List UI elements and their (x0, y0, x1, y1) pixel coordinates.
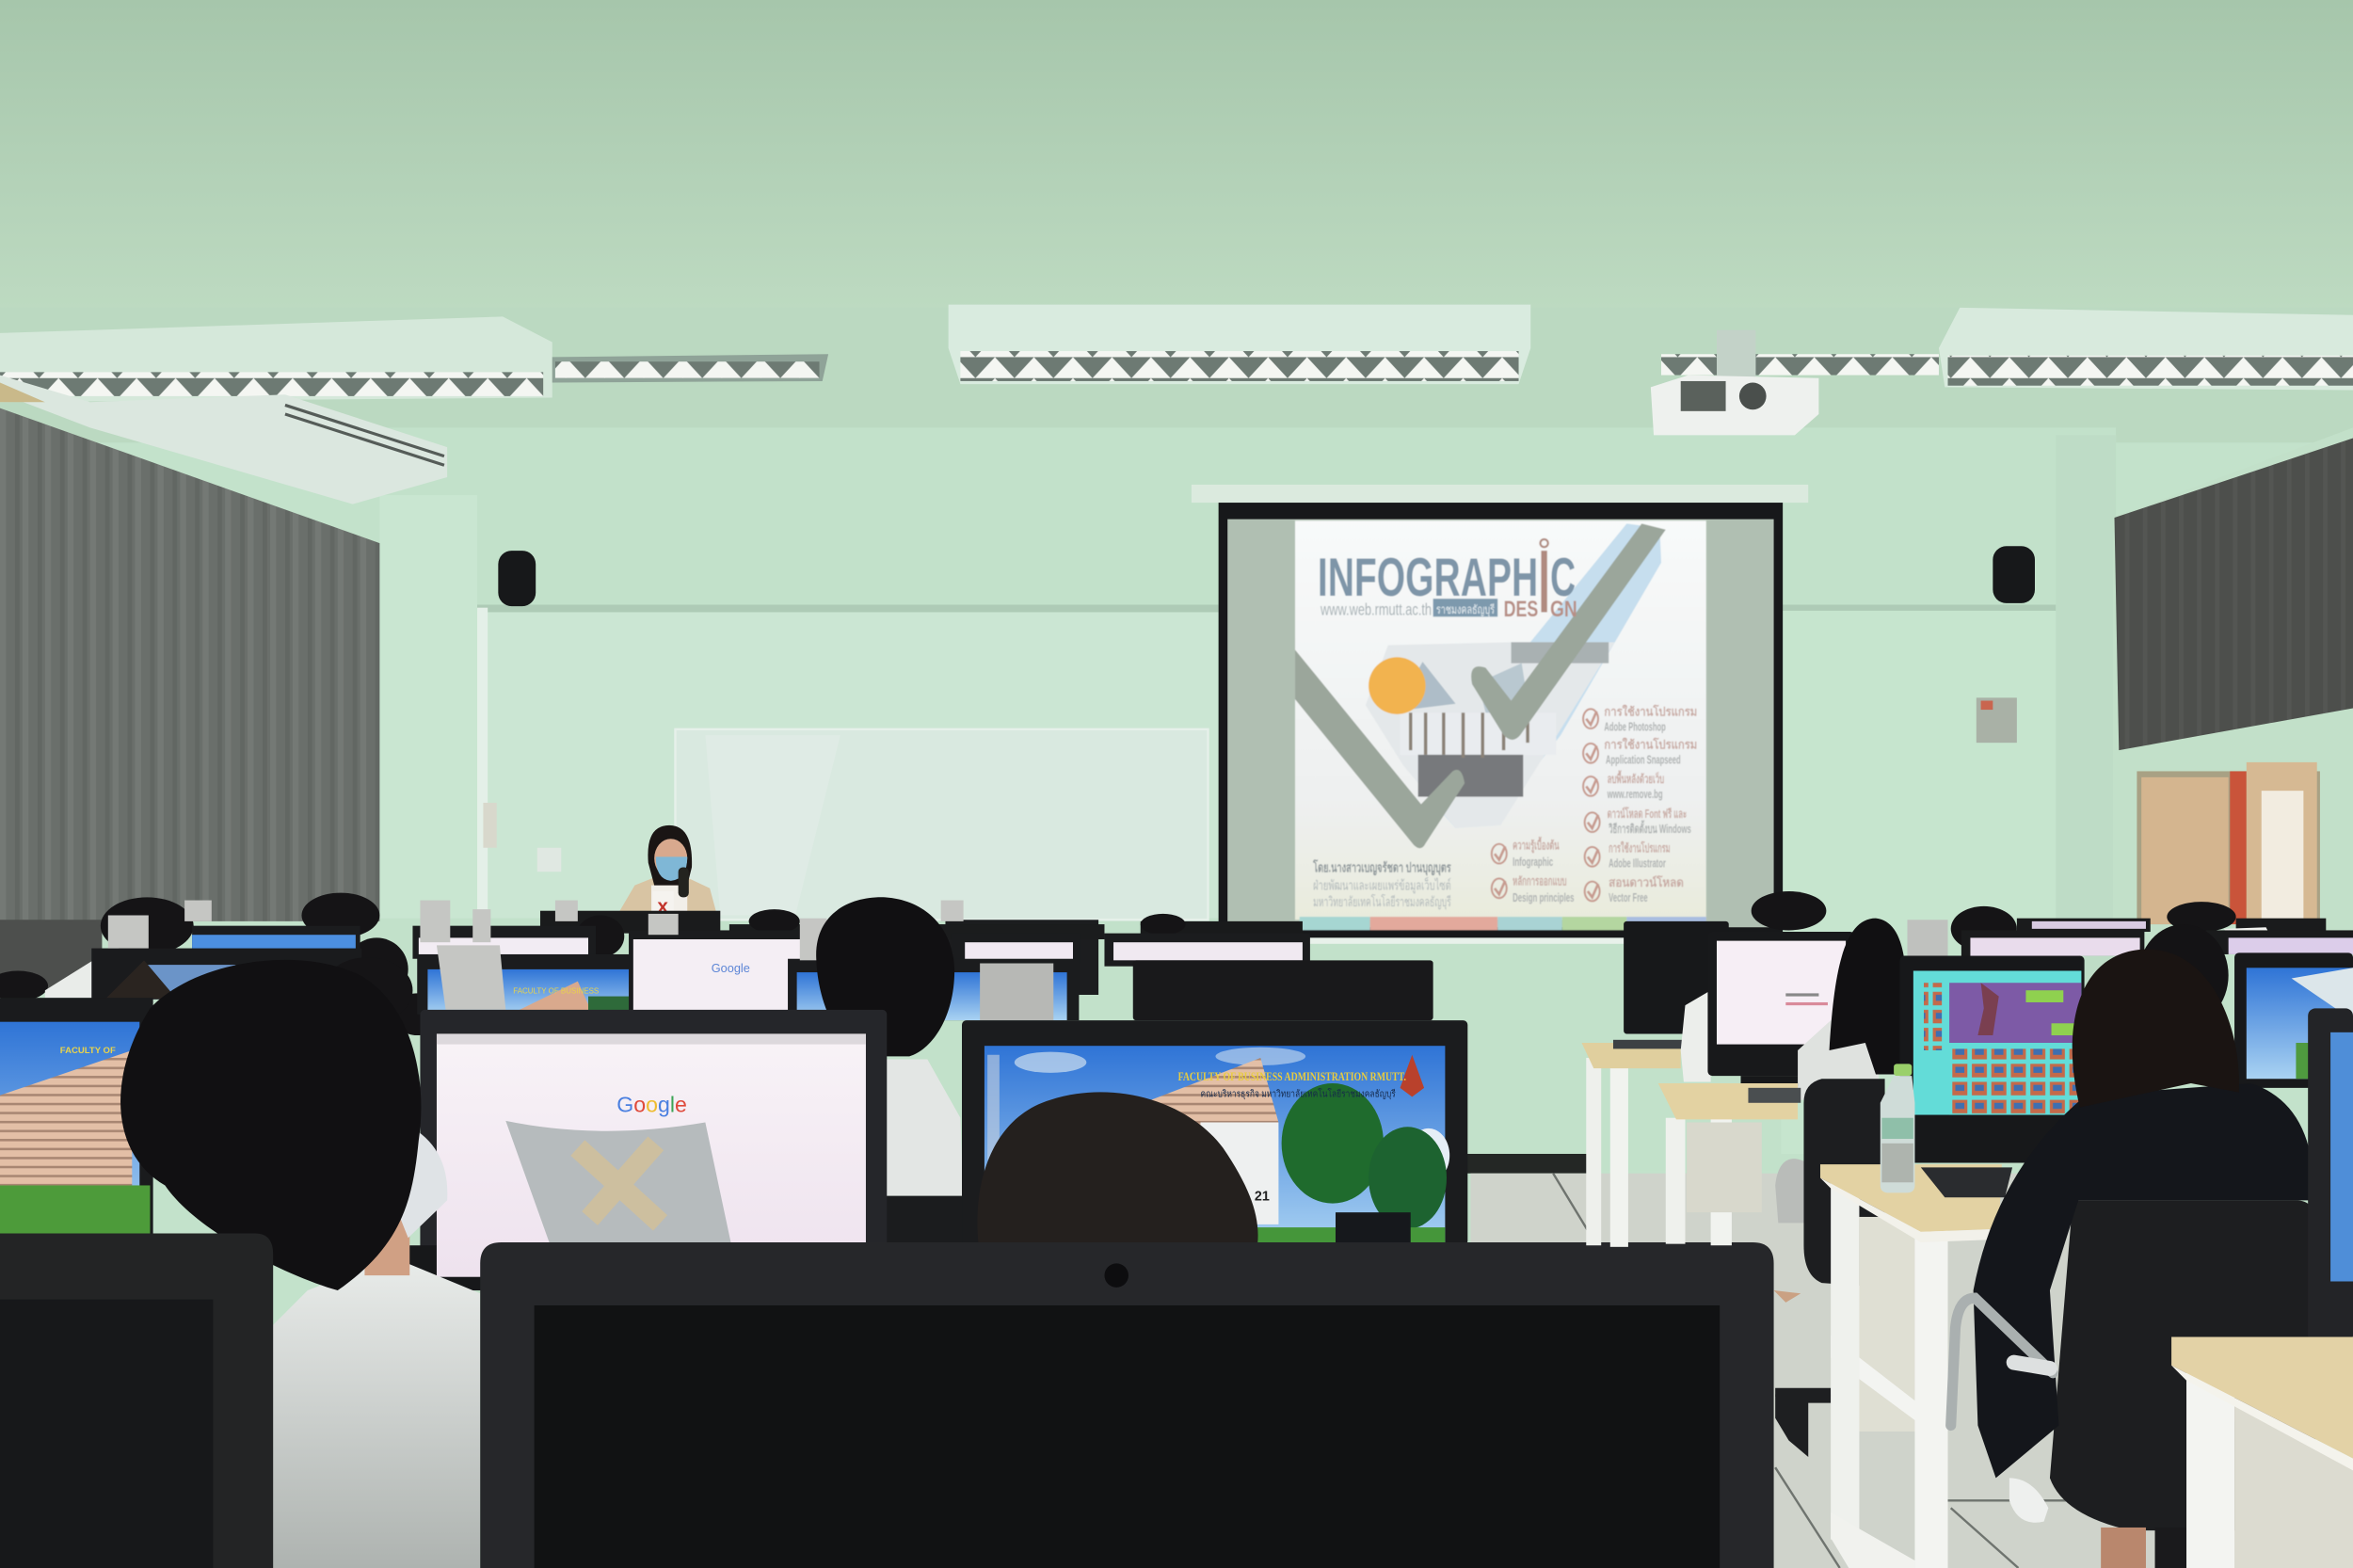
slide checklist: Infographic (1513, 855, 1553, 869)
slide checklist: สอนดาวน์โหลด (1609, 874, 1684, 889)
presenter: x (657, 895, 668, 917)
right curtain (2114, 439, 2353, 750)
monitor row 4 (45, 926, 1310, 1023)
head behind girl (2138, 924, 2229, 1026)
student hair foreground center (977, 1092, 1258, 1244)
slide students (1401, 712, 1556, 797)
slide website line: www.web.rmutt.ac.th (1320, 600, 1432, 619)
monitor: left wallpaper: FACULTY OF (60, 1046, 116, 1056)
speaker left (498, 551, 536, 606)
ceiling (0, 0, 2353, 323)
slide checklist: Adobe Illustrator (1609, 856, 1666, 870)
wallpaper (984, 1046, 1449, 1247)
monitor right front (2308, 1008, 2353, 1343)
slide presenter text: ฝ่ายพัฒนาและเผยแพร่ข้อมูลเว็บไซต์ (1313, 875, 1451, 893)
door (2137, 762, 2320, 924)
front wall (0, 308, 2353, 1171)
slide design word: GN (1550, 597, 1577, 622)
chair foreground with armrest (2009, 1200, 2315, 1568)
slide color bars (1300, 917, 1706, 930)
monitor: desktop wallpaper (962, 1020, 1467, 1247)
slide presenter text (1312, 858, 1451, 910)
projection screen (1215, 503, 1785, 944)
far back row of monitors (0, 911, 2326, 1033)
answer papers on monitors (108, 901, 2280, 1020)
small google logo: Google (712, 961, 750, 975)
speaker right (1993, 546, 2035, 603)
slide title: INFOGRAPH (1318, 548, 1538, 608)
slide: infographic design (1295, 520, 1706, 930)
monitor with game page (1899, 956, 2085, 1163)
slide title (1318, 539, 1576, 612)
slide checklist: Design principles (1513, 890, 1575, 904)
slide checklist: การใช้งานโปรแกรม (1609, 840, 1671, 856)
slide photo band (1366, 523, 1661, 828)
far right monitors (1961, 930, 2353, 956)
chair row 2 (1774, 1079, 1885, 1457)
student foreground left (120, 960, 480, 1568)
monitor: google page (407, 1010, 887, 1290)
slide checklist: Adobe Photoshop (1604, 719, 1666, 733)
projector (1651, 330, 1818, 435)
keyboard (1921, 1167, 2012, 1197)
slide checklist: ลบพื้นหลังด้วยเว็บ (1608, 770, 1664, 786)
student center row (816, 897, 964, 1245)
wall box and switch (483, 697, 2017, 872)
girl in black jacket (1974, 950, 2317, 1478)
desk row 2 (1658, 1083, 1801, 1245)
chrome armrest (1951, 1298, 2053, 1426)
webcam (1104, 1263, 1128, 1288)
wallpaper subtitle: คณะบริหารธุรกิจ มหาวิทยาลัยเทคโนโลยีราชมงคลธัญบุรี (1201, 1087, 1396, 1099)
monitor with white page (1707, 932, 1855, 1086)
screen rail (1192, 485, 1808, 503)
slide presenter text: โดย.นางสาวเบญจรัชดา ปานบุญบุตร (1312, 858, 1451, 875)
student long hair (1798, 919, 1907, 1100)
light fixtures (0, 305, 2353, 402)
monitor right top (2234, 952, 2353, 1088)
front monitor center (480, 1242, 1774, 1568)
slide checklist: www.remove.bg (1607, 787, 1663, 801)
desk row 4 (2171, 1336, 2353, 1568)
slide checklist: หลักการออกแบบ (1513, 874, 1567, 888)
slide checklist: Vector Free (1609, 890, 1648, 904)
slide checkmarks (1295, 523, 1666, 848)
whiteboard (675, 729, 1208, 920)
monitor: left wallpaper (0, 998, 153, 1238)
slide presenter text: มหาวิทยาลัยเทคโนโลยีราชมงคลธัญบุรี (1313, 894, 1451, 910)
desk row 3 (1820, 1164, 2012, 1568)
wallpaper date: 21 (1255, 1189, 1270, 1204)
monitor row 3 (417, 930, 1433, 1020)
presenter (619, 825, 720, 927)
slide checklist: การใช้งานโปรแกรม (1604, 737, 1697, 752)
slide blue label: ราชมงคลธัญบุรี (1436, 602, 1495, 617)
slide title: C (1550, 548, 1576, 608)
paper with X (505, 1121, 730, 1242)
white shirt student behind (1681, 990, 1711, 1081)
monitor row 3: FACULTY OF BUSINESS (513, 986, 599, 995)
slide design word: DES (1504, 597, 1538, 622)
front monitor left (0, 1233, 273, 1568)
air conditioner (0, 376, 447, 504)
slide checklist: ดาวน์โหลด Font ฟรี และ (1608, 806, 1687, 821)
slide design word (1504, 597, 1577, 622)
google logo: Google (616, 1092, 687, 1116)
back row heads (0, 891, 2236, 1035)
slide checklist (1492, 703, 1697, 904)
slide checklist: วิธีการติดตั้งบน Windows (1609, 820, 1691, 836)
slide checklist: การใช้งานโปรแกรม (1604, 703, 1697, 718)
slide blue label (1433, 599, 1497, 617)
left curtain (0, 408, 379, 921)
wallpaper title: FACULTY OF BUSINESS ADMINISTRATION RMUTT. (1178, 1070, 1406, 1083)
desk row 1 (1581, 1040, 1684, 1247)
floor and baseboard (1426, 1154, 2176, 1568)
slide checklist: ความรู้เบื้องต้น (1513, 836, 1560, 853)
slide checklist: Application Snapseed (1606, 752, 1681, 766)
water bottle (1881, 1064, 1914, 1192)
